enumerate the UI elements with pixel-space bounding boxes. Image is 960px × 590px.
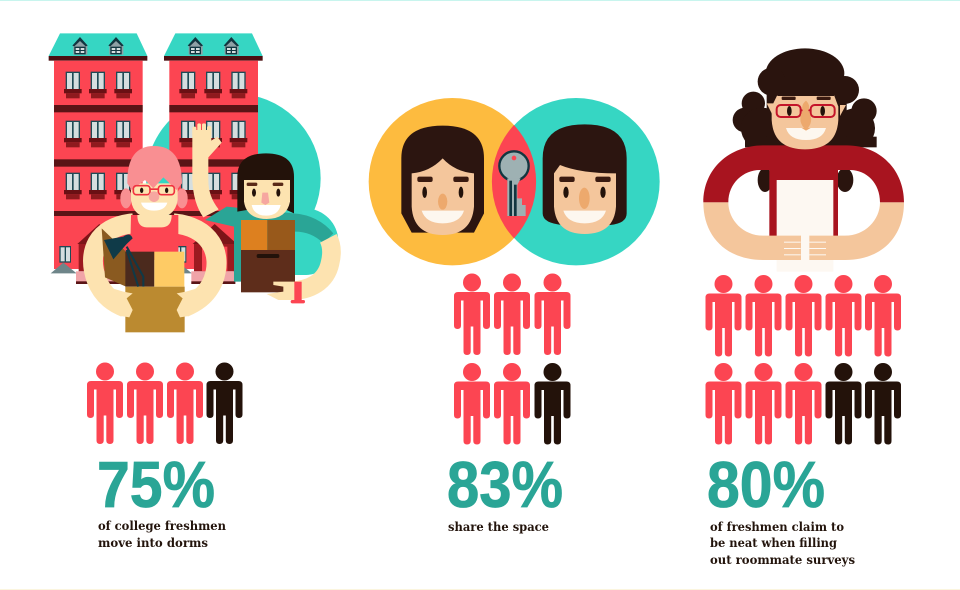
- caption: 80%: of freshmen claim to: [710, 519, 844, 534]
- key icon: [499, 151, 529, 216]
- pictogram: 8 of 10 people: [706, 275, 901, 444]
- face left: [401, 126, 484, 235]
- caption: 75%: [98, 518, 226, 550]
- face right: [543, 124, 627, 234]
- cardboard box with lamp: [102, 228, 185, 332]
- red sweater: [703, 145, 904, 237]
- moving box held by waving student: [241, 220, 295, 292]
- caption: 80%: [710, 519, 855, 567]
- student with pink hair carrying a box: [93, 146, 217, 307]
- panel: shared space illustration: [369, 98, 660, 265]
- forearm and hands: [703, 202, 904, 260]
- caption: 75%: move into dorms: [98, 535, 208, 550]
- statistic: 80%: 80%: [707, 448, 825, 521]
- pictogram: 5 of 6 people: [454, 274, 570, 444]
- caption: 75%: of college freshmen: [98, 518, 226, 533]
- caption: 83%: share the space: [448, 519, 549, 534]
- roommate circle yellow: [369, 98, 536, 265]
- dorm building left: [49, 33, 147, 284]
- statistic: 75%: 75%: [97, 448, 215, 521]
- dorm building right: [164, 33, 263, 284]
- caption: 80%: be neat when filling: [710, 535, 837, 550]
- hands on box: [107, 287, 203, 317]
- panel: move into dorms illustration: [49, 33, 338, 332]
- roommate circle teal: [492, 98, 660, 265]
- overlap lens: [492, 125, 536, 238]
- panel: neat freshman illustration: [703, 48, 904, 272]
- head with glasses: [767, 90, 846, 149]
- caption: 80%: out roommate surveys: [710, 552, 855, 567]
- curly hair: [733, 48, 877, 192]
- statistic: 83%: 83%: [447, 448, 563, 521]
- paper sheet: [777, 180, 833, 272]
- waving student: [192, 123, 333, 303]
- pictogram: 3 of 4 people: [87, 362, 242, 444]
- teal background blob: [146, 93, 338, 275]
